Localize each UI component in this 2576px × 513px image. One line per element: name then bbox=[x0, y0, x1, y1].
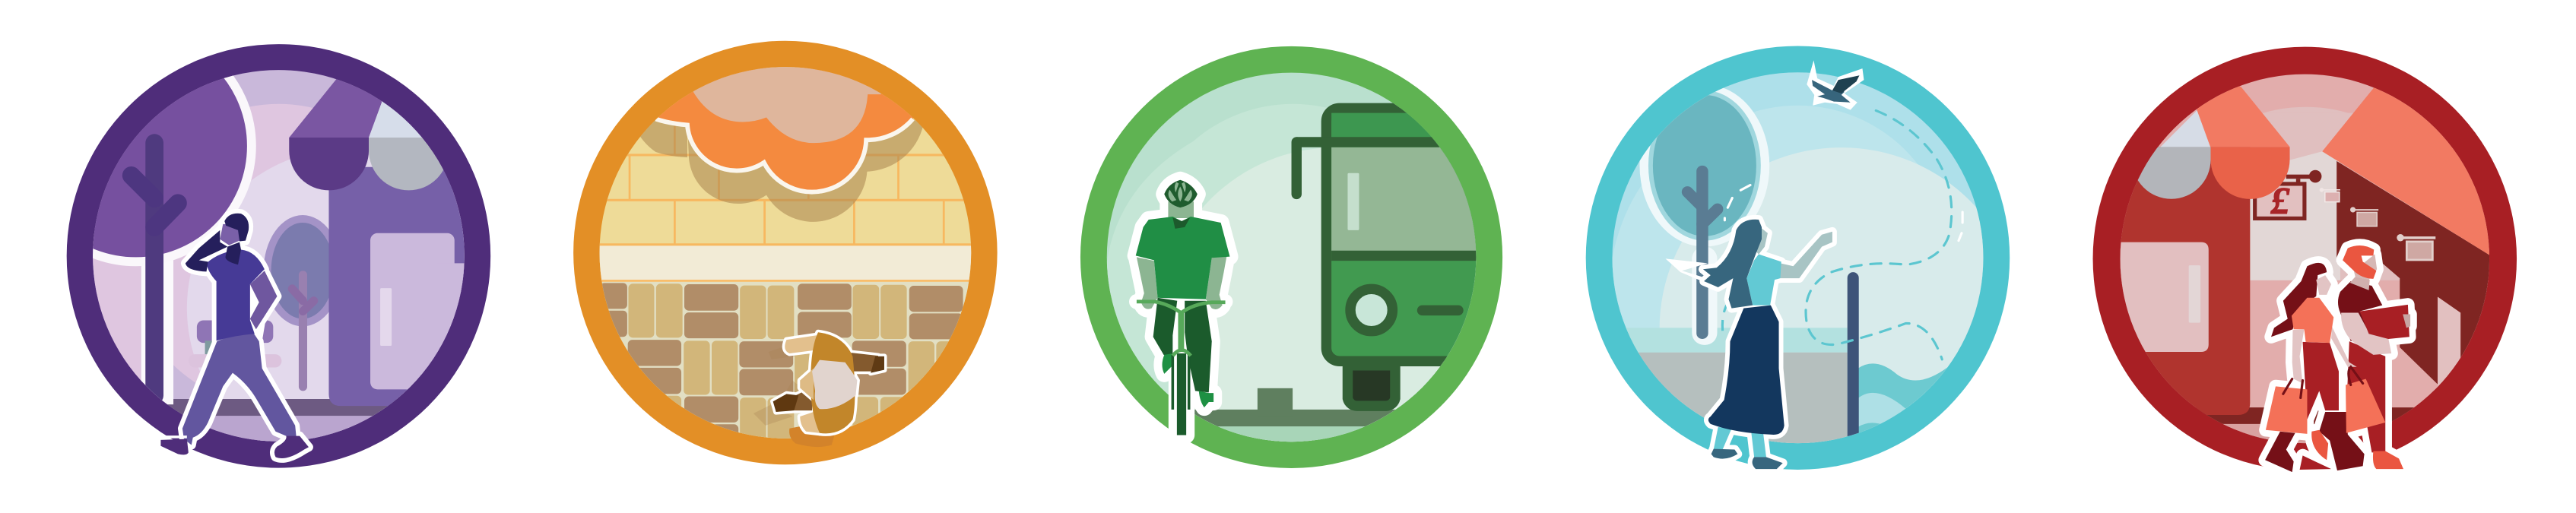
figure: pedestrian seen from above bbox=[773, 332, 884, 433]
roundel 1: pedestrian on phone on a shopping street bbox=[67, 44, 491, 468]
figure: man on phone bbox=[160, 214, 309, 458]
figure: woman in long skirt bbox=[1665, 220, 1832, 469]
street scene bbox=[93, 70, 465, 442]
figure: cyclist with helmet bbox=[1136, 180, 1229, 435]
bus scene bbox=[1107, 73, 1477, 442]
pavement and awning scene bbox=[599, 67, 972, 439]
green ring bbox=[1080, 46, 1502, 468]
purple ring bbox=[67, 44, 490, 468]
icon: flying bird bbox=[1807, 60, 1864, 110]
roundel 3: cyclist beside a bus bbox=[1080, 46, 1502, 468]
figures: couple with shopping bags bbox=[2265, 245, 2410, 472]
roundel 2: overhead view of pedestrian on paving bbox=[573, 41, 1006, 473]
shadow on ring bbox=[789, 426, 835, 447]
teal ring bbox=[1586, 46, 2010, 470]
shop street scene bbox=[2120, 74, 2489, 444]
orange ring bbox=[573, 41, 998, 464]
red ring bbox=[2093, 47, 2517, 470]
seaside scene bbox=[1612, 72, 1983, 444]
roundel 4: woman pointing at a bird by the seaside bbox=[1586, 46, 2010, 470]
roundel 5: couple shopping on a high street bbox=[2093, 47, 2527, 473]
pound sign: £ bbox=[2270, 179, 2290, 221]
